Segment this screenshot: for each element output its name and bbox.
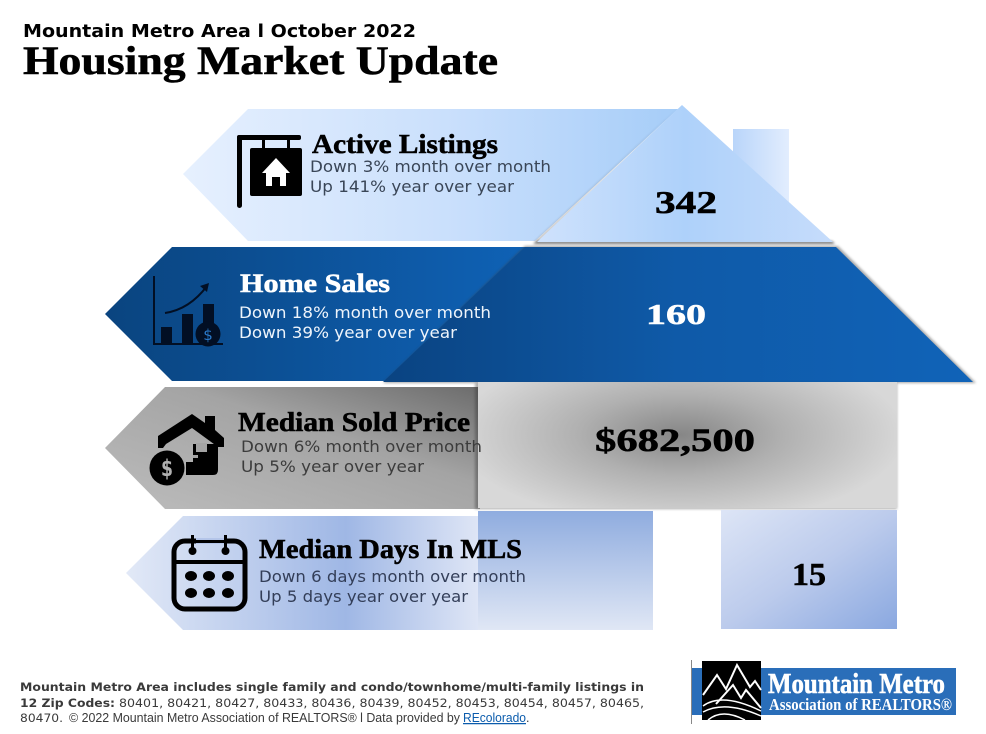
panel: active listings xyxy=(183,109,678,241)
price box with median sold price value xyxy=(478,382,897,508)
logo: Mountain Metro Association of REALTORS xyxy=(691,660,956,724)
footer note: REcolorado xyxy=(463,711,526,725)
icon: house with dollar coin xyxy=(150,414,224,486)
home sales monthly change: Down 18% month over month xyxy=(239,303,491,322)
panel: median days text and icon xyxy=(174,534,526,609)
subtitle: Mountain Metro Area l October 2022 xyxy=(23,21,416,42)
logo: Mountain Metro Association of REALTORS: Mountain Metro xyxy=(768,669,945,700)
icon: house with dollar coin: $ xyxy=(161,456,173,482)
median days in MLS arrow xyxy=(126,516,480,630)
median days heading: Median Days In MLS xyxy=(259,534,522,564)
house right wall with median days value xyxy=(721,510,897,629)
roof with active listings value xyxy=(537,105,833,242)
footer note: © 2022 Mountain Metro Association of REALTORS® l Data provided by xyxy=(69,711,461,725)
icon: rising chart with dollar coin xyxy=(154,276,223,346)
value: 15: 15 xyxy=(792,556,826,592)
footer note xyxy=(20,680,644,725)
roof band shadow xyxy=(383,246,976,383)
median days yearly change: Up 5 days year over year xyxy=(259,587,468,606)
active listings monthly change: Down 3% month over month xyxy=(310,157,551,176)
median sold price monthly change: Down 6% month over month xyxy=(241,437,482,456)
value: $682,500: $682,500 xyxy=(595,423,755,459)
chimney xyxy=(733,129,789,211)
icon: calendar xyxy=(174,535,245,609)
active listings heading: Active Listings xyxy=(312,129,498,159)
median days monthly change: Down 6 days month over month xyxy=(259,567,526,586)
footer note: 80401, 80421, 80427, 80433, 80436, 80439, 80452, 80453, 80454, 80457, 80465, xyxy=(119,696,644,710)
icon: rising chart with dollar coin: $ xyxy=(203,326,213,344)
title: Housing Market Update xyxy=(23,38,498,83)
value: 342: 342 xyxy=(655,184,717,220)
active listings yearly change: Up 141% year over year xyxy=(310,177,514,196)
price box shadow xyxy=(475,383,897,509)
median sold price arrow xyxy=(105,387,480,509)
house left wall xyxy=(478,511,653,630)
roof band with home sales value xyxy=(383,247,973,382)
median sold price yearly change: Up 5% year over year xyxy=(241,457,424,476)
panel: median sold price text and icon xyxy=(150,407,482,486)
footer note: . xyxy=(526,711,529,725)
home sales arrow xyxy=(105,247,530,381)
footer note: 80470. xyxy=(20,711,63,725)
home sales yearly change: Down 39% year over year xyxy=(239,323,457,342)
active listings arrow xyxy=(183,109,678,241)
median sold price heading: Median Sold Price xyxy=(238,407,470,437)
panel: home sales xyxy=(105,247,530,381)
footer note: Mountain Metro Area includes single family and condo/townhome/multi-family listings in xyxy=(20,680,644,694)
home sales heading: Home Sales xyxy=(240,269,390,298)
value: 160: 160 xyxy=(646,299,706,331)
icon: hanging house sign xyxy=(237,135,302,208)
logo: Mountain Metro Association of REALTORS: Association of REALTORS® xyxy=(769,695,952,714)
footer note: 12 Zip Codes: xyxy=(20,696,115,710)
roof shadow xyxy=(533,106,835,244)
